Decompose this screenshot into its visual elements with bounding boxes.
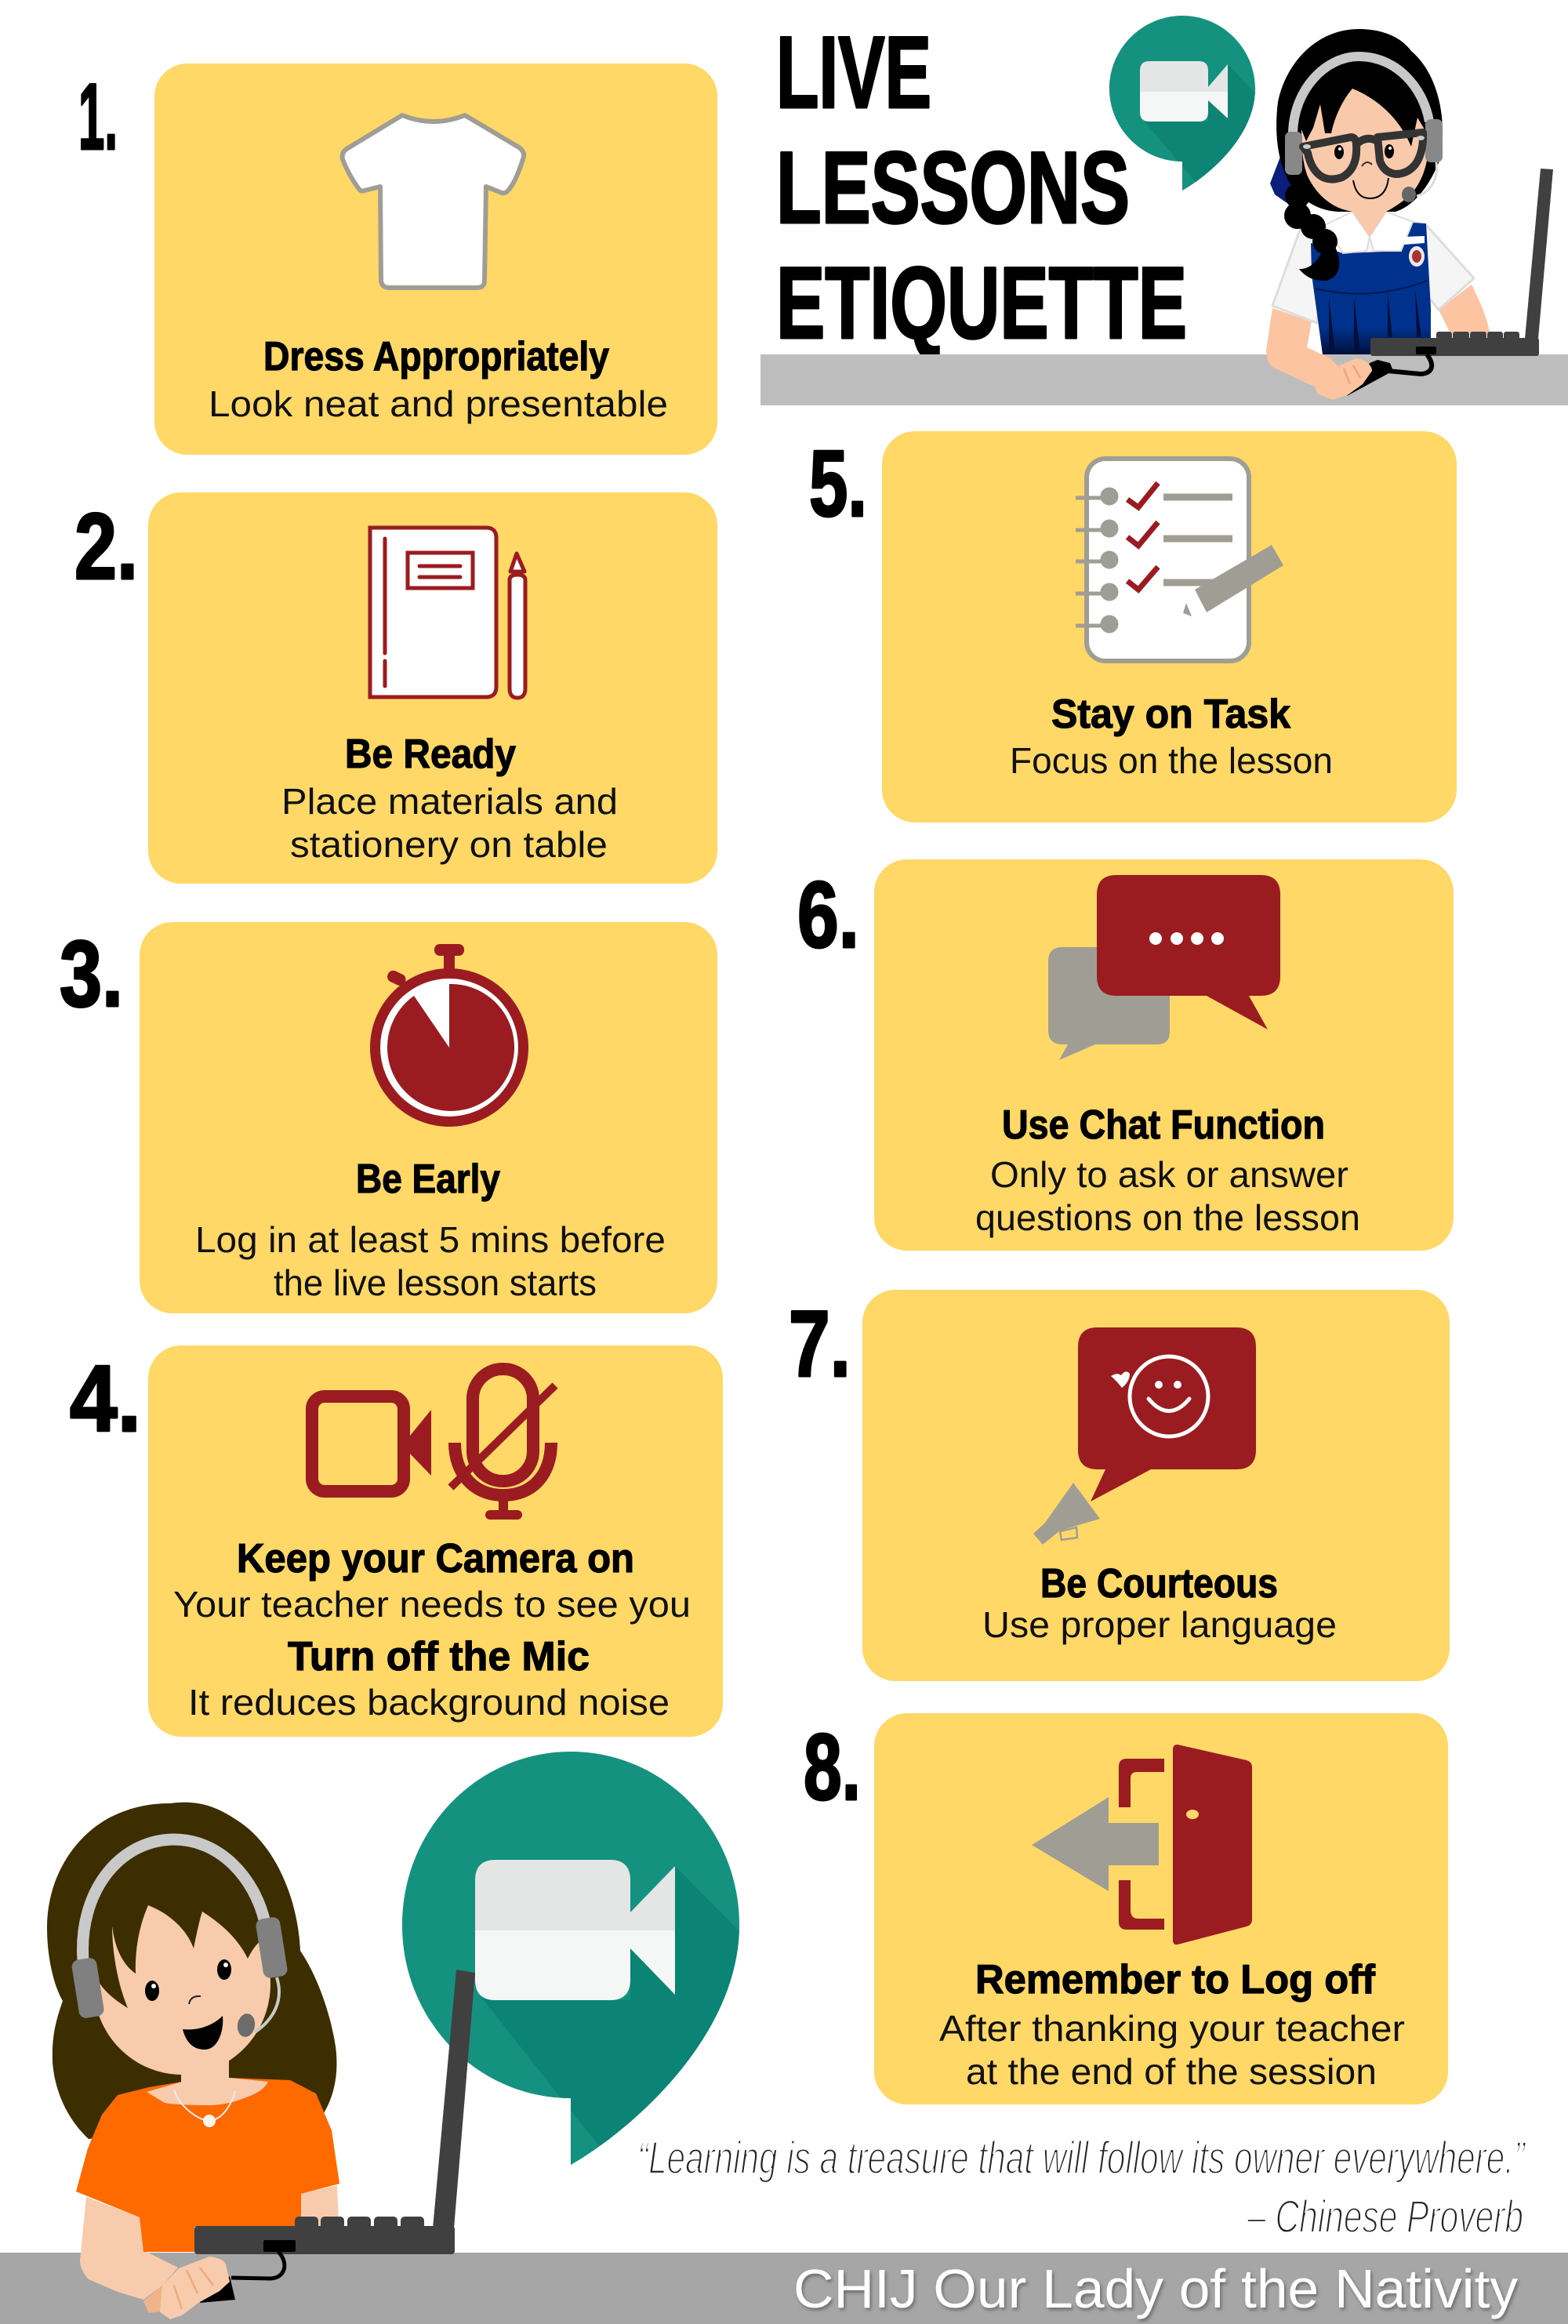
description: at the end of the session xyxy=(966,2051,1377,2092)
infographic canvas: 1. xyxy=(78,64,118,169)
number 8: 8. xyxy=(804,1715,861,1820)
heading: mic: Turn off the Mic xyxy=(288,1634,590,1679)
panel: dress appropriately xyxy=(154,64,717,455)
panel: chat function xyxy=(874,859,1454,1251)
heading: Be Early xyxy=(356,1157,500,1202)
icon: large Google Meet logo xyxy=(402,1752,745,2172)
description: After thanking your teacher xyxy=(939,2008,1405,2049)
panel: be ready xyxy=(148,492,717,884)
description: Focus on the lesson xyxy=(1010,740,1333,781)
panel: camera and mic xyxy=(148,1345,723,1737)
heading: Use Chat Function xyxy=(1002,1102,1325,1148)
title xyxy=(776,15,1187,360)
panel: log off xyxy=(874,1713,1448,2104)
description: Look neat and presentable xyxy=(209,383,668,424)
number 4: 4. xyxy=(70,1346,141,1451)
icon: smiley speech bubble with megaphone xyxy=(1033,1327,1256,1545)
illustration: student with orange shirt and headset at laptop xyxy=(47,1803,475,2319)
description: Only to ask or answer xyxy=(990,1154,1348,1195)
description xyxy=(939,2008,1405,2092)
heading: Be Courteous xyxy=(1040,1561,1278,1607)
icon: checklist with pencil xyxy=(1076,459,1283,661)
top grey desk band xyxy=(760,354,1568,405)
heading: Stay on Task xyxy=(1051,692,1290,737)
icon: t-shirt xyxy=(343,115,524,288)
description: Use proper language xyxy=(982,1604,1337,1645)
description: questions on the lesson xyxy=(975,1197,1360,1238)
number 5: 5. xyxy=(809,431,867,536)
description xyxy=(281,781,618,865)
footer grey band xyxy=(0,2253,1568,2324)
number 2: 2. xyxy=(74,494,138,599)
description: Place materials and xyxy=(281,781,618,822)
icon: muted microphone xyxy=(451,1369,555,1515)
illustration: student with glasses and headset at laptop xyxy=(1266,29,1553,400)
icon: video camera xyxy=(312,1396,431,1491)
icon: small Google Meet logo xyxy=(1109,16,1258,196)
description: the live lesson starts xyxy=(274,1262,597,1303)
description: stationery on table xyxy=(290,824,608,865)
icon: stopwatch xyxy=(370,944,528,1127)
panel: be courteous xyxy=(862,1290,1450,1681)
title: LESSONS xyxy=(776,130,1130,245)
description: Log in at least 5 mins before xyxy=(195,1219,666,1260)
description: camera: Your teacher needs to see you xyxy=(173,1584,691,1625)
heading: camera: Keep your Camera on xyxy=(237,1536,634,1581)
description: mic: It reduces background noise xyxy=(188,1682,670,1723)
heading: Be Ready xyxy=(345,732,516,777)
title: ETIQUETTE xyxy=(776,245,1187,360)
number 7: 7. xyxy=(789,1291,851,1396)
footer school name: CHIJ Our Lady of the Nativity xyxy=(793,2258,1518,2319)
description xyxy=(195,1219,666,1303)
heading: Remember to Log off xyxy=(975,1957,1376,2003)
icon: exit door with arrow xyxy=(1032,1745,1252,1945)
panel: stay on task xyxy=(882,431,1457,822)
description xyxy=(975,1154,1360,1238)
number 3: 3. xyxy=(60,921,123,1026)
number 6: 6. xyxy=(797,862,859,968)
quote xyxy=(637,2133,1526,2242)
panel: be early xyxy=(140,922,717,1313)
heading: Dress Appropriately xyxy=(263,334,609,379)
icon: notebook and pencil xyxy=(370,528,525,698)
title: LIVE xyxy=(776,15,931,129)
icon: chat bubbles xyxy=(1048,875,1280,1060)
